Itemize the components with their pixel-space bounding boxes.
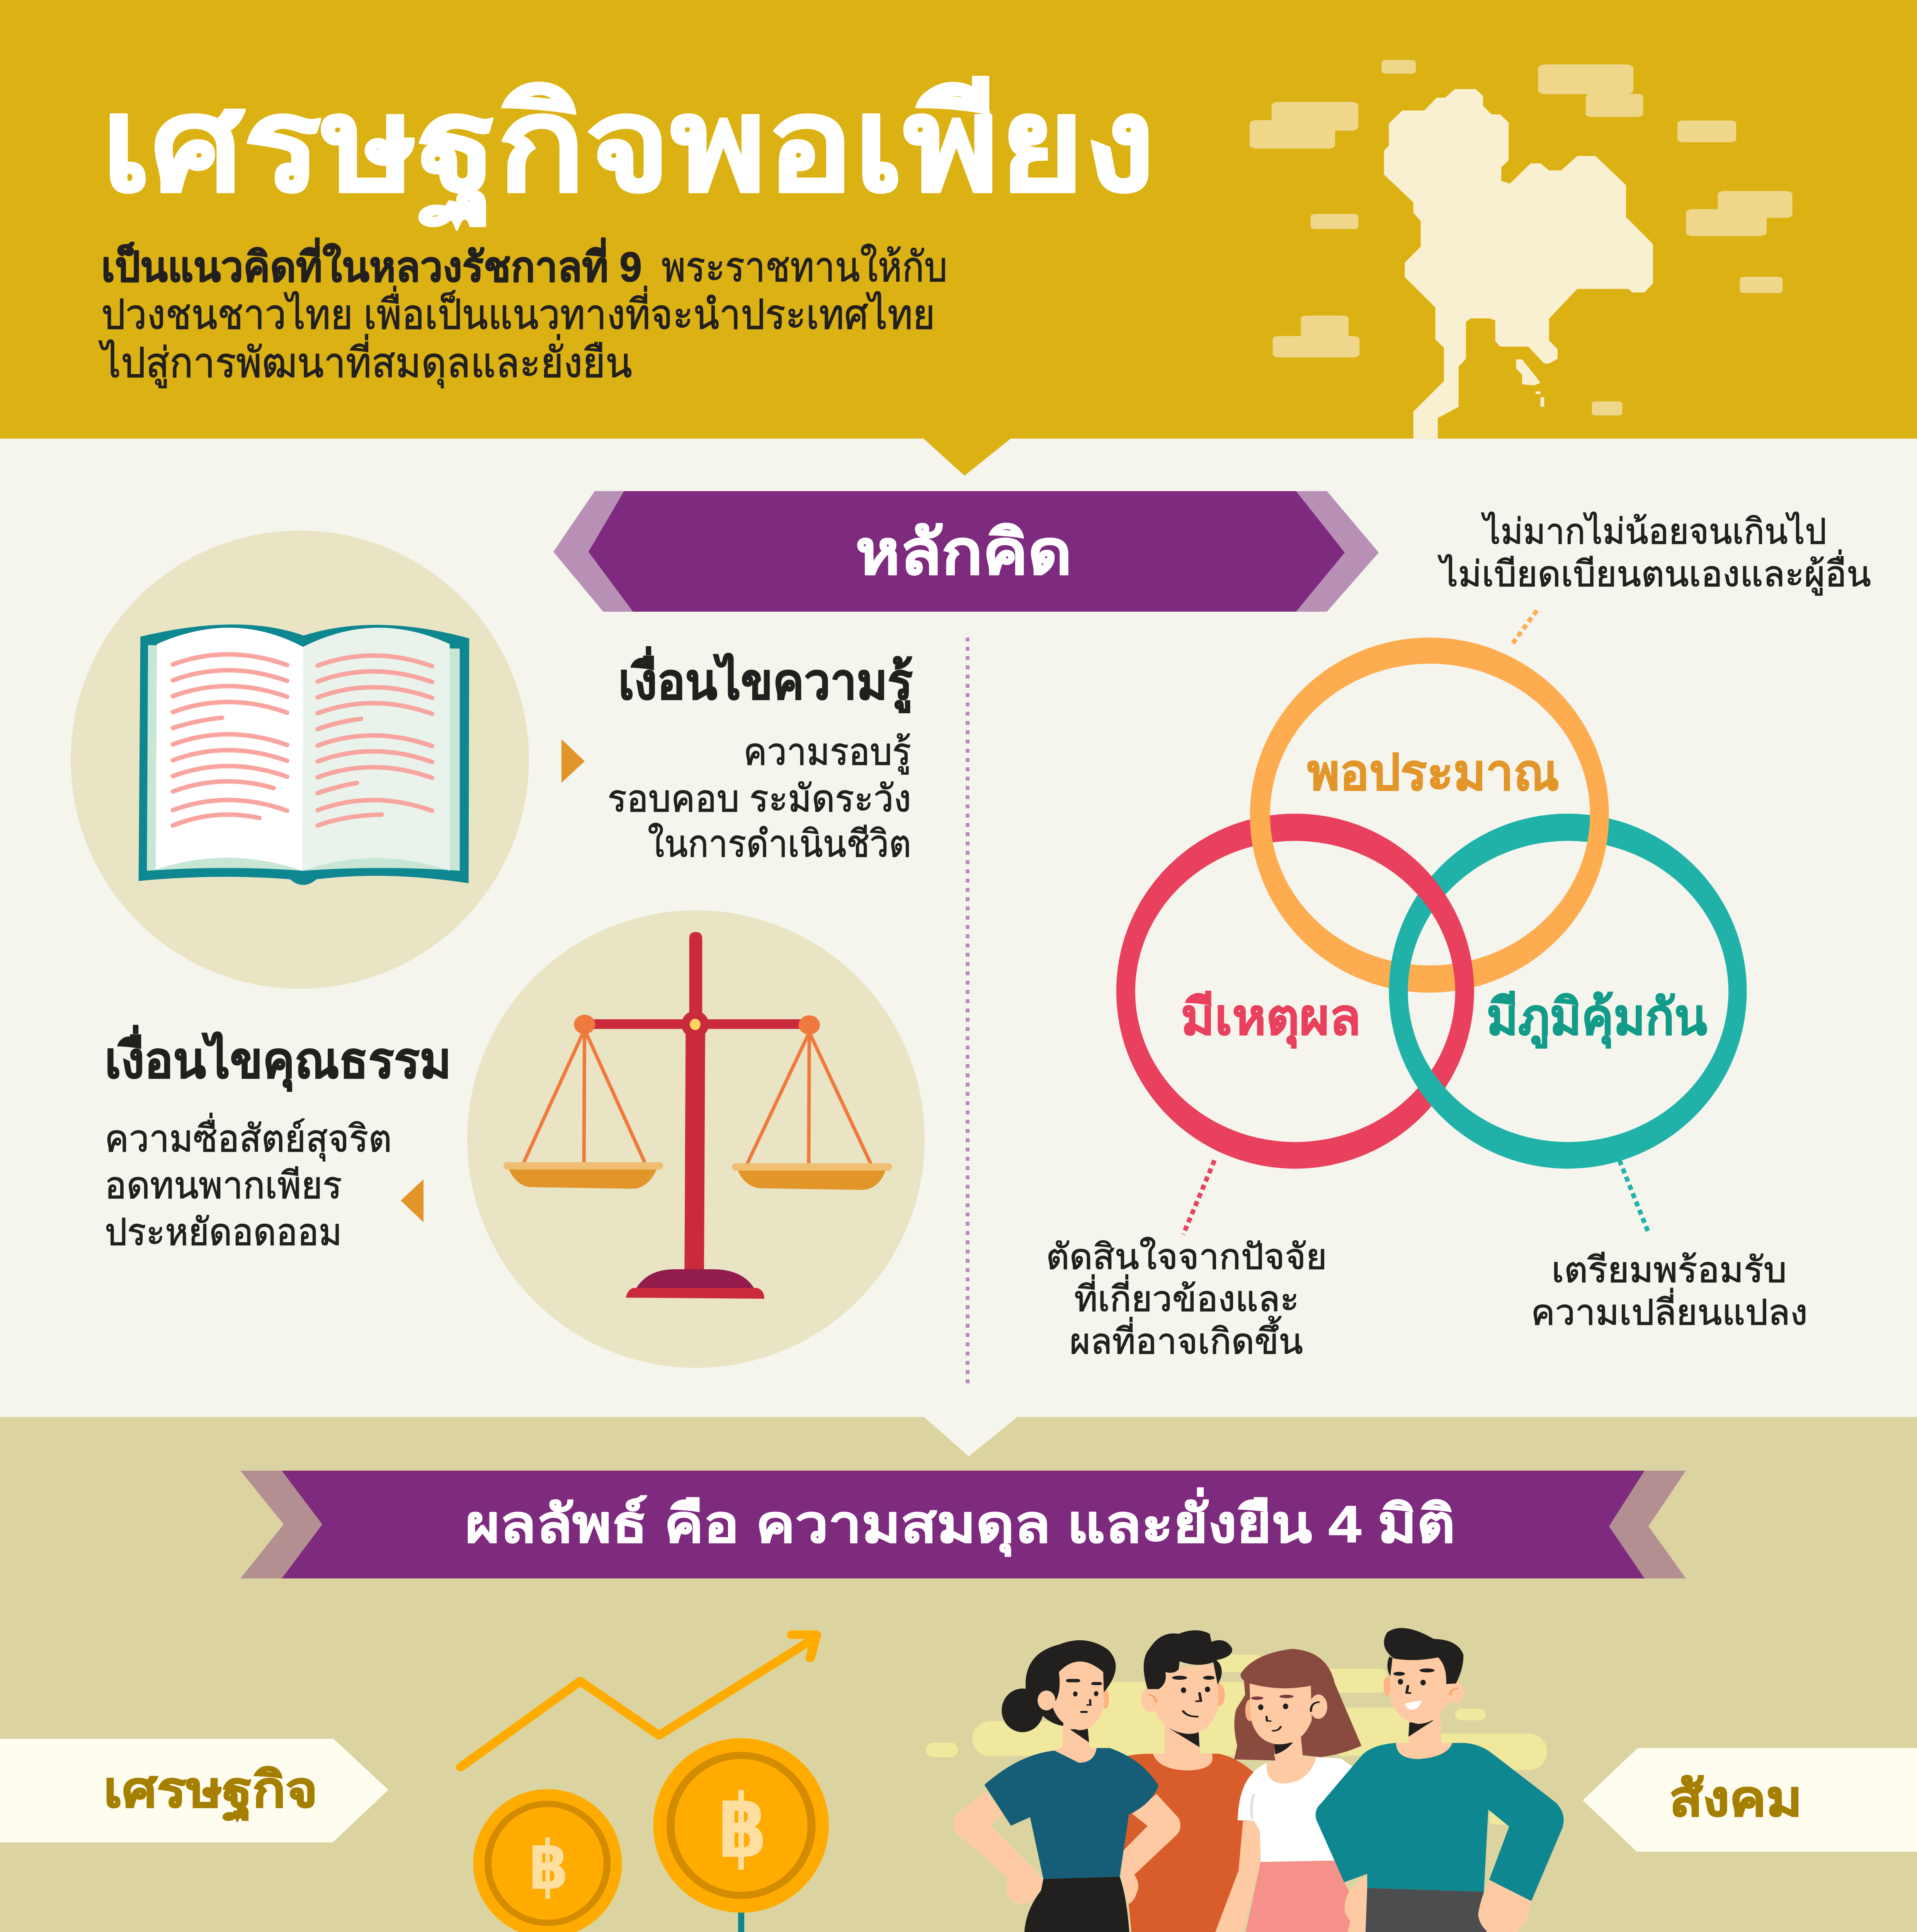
text: knowledge details: ความรอบรู้ xyxy=(743,731,911,774)
heading: knowledge: เงื่อนไขความรู้ xyxy=(618,646,913,713)
chart: three circles venn xyxy=(1046,512,1871,1361)
text: knowledge details xyxy=(607,731,911,865)
person: white shirt woman xyxy=(1189,1649,1367,1932)
person: teal sweater man xyxy=(1316,1628,1564,1932)
label: immunity: มีภูมิคุ้มกัน xyxy=(1487,989,1707,1049)
intro text: พระราชทานให้กับ xyxy=(662,243,947,290)
text: morality details: อดทนพากเพียร xyxy=(105,1164,342,1206)
text: reason note: ตัดสินใจจากปัจจัย xyxy=(1046,1237,1327,1277)
icon: open book xyxy=(139,624,469,885)
banner: results heading xyxy=(240,1471,1686,1578)
label: reasonableness: มีเหตุผล xyxy=(1181,989,1361,1049)
panel: morality condition xyxy=(105,910,925,1368)
banner: principle heading xyxy=(553,491,1379,612)
text: immunity note: ความเปลี่ยนแปลง xyxy=(1531,1288,1808,1332)
text: reason note xyxy=(1046,1237,1327,1361)
text: morality details: ความซื่อสัตย์สุจริต xyxy=(105,1113,392,1162)
panel: knowledge condition xyxy=(71,531,913,989)
text: immunity note xyxy=(1531,1250,1808,1332)
text: morality details xyxy=(105,1113,392,1253)
banner: principle heading: หลักคิด xyxy=(856,518,1072,587)
tag: economy xyxy=(0,1739,388,1842)
text: reason note: ที่เกี่ยวข้องและ xyxy=(1074,1274,1299,1319)
banner: results heading: ผลลัพธ์ คือ ความสมดุล และยั่งยืน 4 มิติ xyxy=(465,1487,1455,1557)
text: moderation note: ไม่มากไม่น้อยจนเกินไป xyxy=(1481,512,1827,551)
illustration: group of four people xyxy=(926,1628,1564,1932)
text: immunity note: เตรียมพร้อมรับ xyxy=(1551,1250,1787,1290)
panel: header xyxy=(0,0,1917,476)
icon: pointer triangle xyxy=(401,1179,424,1222)
panel: results upper band xyxy=(0,1417,1917,1932)
label: moderation: พอประมาณ xyxy=(1307,744,1559,801)
tag: society: สังคม xyxy=(1669,1771,1802,1827)
heading: morality: เงื่อนไขคุณธรรม xyxy=(105,1025,451,1092)
text: moderation note xyxy=(1437,512,1871,595)
intro text: ไปสู่การพัฒนาที่สมดุลและยั่งยืน xyxy=(99,334,632,388)
illustration: baht coin plants and arrow xyxy=(461,1635,829,1932)
text: knowledge details: ในการดำเนินชีวิต xyxy=(648,823,911,865)
leader: red dotted xyxy=(1183,1160,1214,1235)
intro text: ปวงชนชาวไทย เพื่อเป็นแนวทางที่จะนำประเทศไทย xyxy=(101,286,935,338)
leader: teal dotted xyxy=(1619,1160,1649,1235)
intro text xyxy=(99,238,947,388)
title: เศรษฐกิจพอเพียง xyxy=(101,71,1155,231)
person: blue shirt woman xyxy=(954,1640,1180,1932)
person: orange shirt man xyxy=(1123,1630,1254,1932)
tag: economy: เศรษฐกิจ xyxy=(104,1762,318,1822)
intro text: เป็นแนวคิดที่ในหลวงรัชกาลที่ 9 xyxy=(101,238,642,290)
text: reason note: ผลที่อาจเกิดขึ้น xyxy=(1070,1316,1303,1361)
icon: thailand map with clouds xyxy=(1250,60,1792,439)
text: moderation note: ไม่เบียดเบียนตนเองและผู้อื่น xyxy=(1437,549,1871,595)
divider: vertical dotted line xyxy=(966,638,970,1383)
icon: scales xyxy=(503,932,892,1299)
illustration: baht coin plants and arrow: ฿ xyxy=(718,1776,767,1878)
text: morality details: ประหยัดอดออม xyxy=(105,1211,342,1253)
illustration: baht coin plants and arrow: ฿ xyxy=(529,1826,568,1905)
leader: orange dotted xyxy=(1511,611,1537,645)
icon: pointer triangle xyxy=(561,739,585,783)
tag: society xyxy=(1583,1748,1917,1852)
text: knowledge details: รอบคอบ ระมัดระวัง xyxy=(607,777,911,820)
